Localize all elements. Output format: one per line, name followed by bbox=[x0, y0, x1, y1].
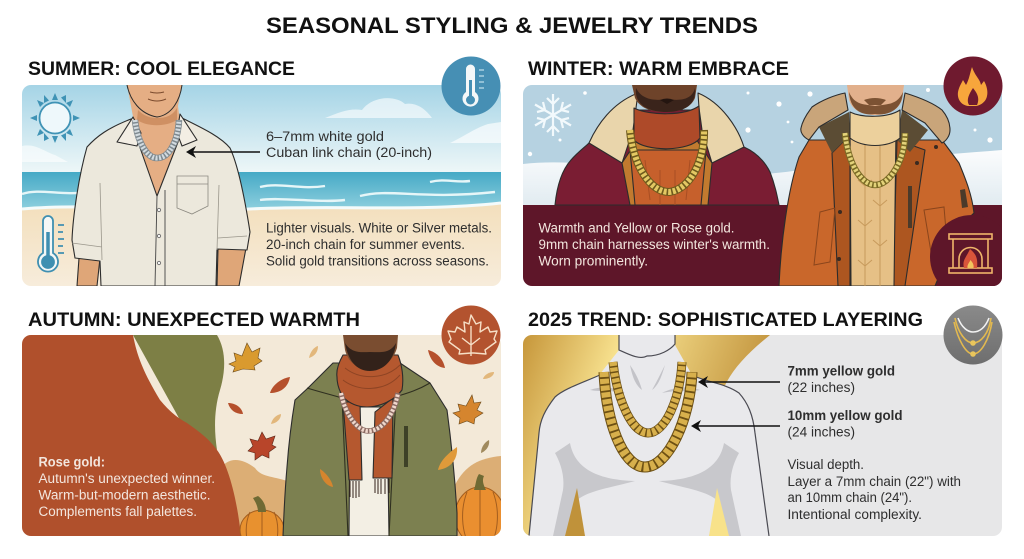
callout text: chain bbox=[266, 129, 432, 160]
icon: small thermometer bbox=[38, 216, 64, 272]
figure: man in burgundy coat bbox=[555, 85, 779, 205]
falling leaves bbox=[228, 343, 494, 460]
necklace: silver chain bbox=[135, 120, 179, 158]
callout text: chain: Cuban link chain (20-inch) bbox=[266, 145, 432, 160]
panel: summer bbox=[22, 56, 501, 286]
text block: layering notes: Intentional complexity. bbox=[788, 507, 922, 522]
necklace: gold chain bbox=[845, 133, 905, 185]
text block: layering notes bbox=[788, 457, 961, 522]
text block: layering notes: Visual depth. bbox=[788, 457, 864, 472]
figure: torso bbox=[529, 335, 769, 536]
title: SEASONAL STYLING & JEWELRY TRENDS bbox=[266, 13, 758, 38]
text block: winter notes: Worn prominently. bbox=[538, 254, 648, 268]
callout text: chain: 6–7mm white gold bbox=[266, 129, 384, 144]
snowy background bbox=[523, 85, 1002, 286]
figure: man in green jacket bbox=[283, 335, 457, 536]
icon: layered necklaces badge bbox=[944, 306, 1002, 364]
figure: man in orange parka bbox=[779, 85, 974, 286]
text block: autumn notes: Autumn's unexpected winner. bbox=[38, 471, 215, 486]
icon: thermometer badge bbox=[442, 56, 500, 116]
figure: man in white shirt bbox=[72, 85, 250, 286]
beach background bbox=[22, 85, 501, 286]
text block: winter notes: Warmth and Yellow or Rose gold. bbox=[538, 220, 734, 236]
necklace: 7mm inner chain bbox=[613, 362, 682, 433]
icon: snowflake bbox=[535, 94, 571, 136]
label: 10mm yellow gold bbox=[788, 408, 902, 440]
icon: flame badge bbox=[944, 56, 1002, 116]
pumpkins bbox=[240, 474, 501, 536]
label: 7mm yellow gold: 7mm yellow gold bbox=[788, 364, 895, 378]
text block: layering notes: an 10mm chain (24"). bbox=[788, 490, 912, 505]
panel: 2025 trend bbox=[523, 306, 1002, 536]
label: 10mm yellow gold: 10mm yellow gold bbox=[788, 408, 902, 423]
icon: sun bbox=[30, 93, 80, 143]
text block: summer notes bbox=[266, 220, 492, 268]
panel: winter bbox=[523, 56, 1014, 299]
arrow: 10mm chain bbox=[691, 420, 780, 432]
text block: summer notes: 20-inch chain for summer events. bbox=[266, 237, 465, 252]
label: 10mm yellow gold: (24 inches) bbox=[788, 424, 855, 440]
heading: winter: WINTER: WARM EMBRACE bbox=[528, 59, 789, 80]
heading: summer: SUMMER: COOL ELEGANCE bbox=[28, 59, 295, 80]
autumn background bbox=[22, 335, 501, 536]
necklace: rose gold chain bbox=[341, 393, 398, 431]
text block: autumn notes bbox=[38, 454, 215, 519]
text block: autumn notes: Warm-but-modern aesthetic. bbox=[38, 488, 210, 502]
arrow: 7mm chain bbox=[698, 376, 780, 388]
icon: maple leaf badge bbox=[442, 306, 500, 364]
heading: autumn: AUTUMN: UNEXPECTED WARMTH bbox=[28, 310, 360, 331]
text block: summer notes: Lighter visuals. White or Silver metals. bbox=[266, 220, 492, 236]
text block: winter notes: 9mm chain harnesses winter's warmth. bbox=[538, 237, 770, 252]
icon: fireplace bbox=[930, 215, 1002, 286]
necklace: gold chain bbox=[630, 130, 704, 192]
text block: autumn notes: Complements fall palettes. bbox=[38, 504, 197, 519]
layering background bbox=[523, 335, 1002, 536]
text block: layering notes: Layer a 7mm chain (22") with bbox=[788, 474, 961, 489]
necklace: 10mm outer chain bbox=[604, 372, 692, 467]
arrow: chain callout bbox=[186, 146, 260, 158]
text block: winter notes bbox=[538, 220, 770, 268]
text block: summer notes: Solid gold transitions across seasons. bbox=[266, 254, 489, 268]
heading: 2025 trend: 2025 TREND: SOPHISTICATED LAYERING bbox=[528, 310, 923, 331]
label: 7mm yellow gold: (22 inches) bbox=[788, 380, 855, 395]
panel: autumn bbox=[22, 306, 505, 550]
label: 7mm yellow gold bbox=[788, 364, 895, 395]
text block: autumn notes: Rose gold: bbox=[38, 454, 105, 470]
